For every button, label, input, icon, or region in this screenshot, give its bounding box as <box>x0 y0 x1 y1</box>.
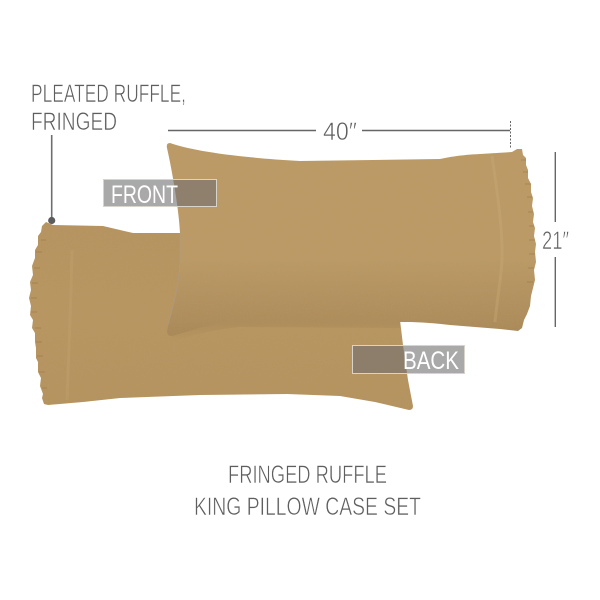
front pillow left edge highlight <box>168 233 180 325</box>
dimension: height 21 inches: 21″ <box>542 227 569 255</box>
callout text line 1: PLEATED RUFFLE, <box>31 80 186 108</box>
front pillow seam <box>492 156 502 322</box>
back pillow <box>29 222 413 410</box>
callout: pleated ruffle, fringed <box>31 80 186 224</box>
callout text line 2: FRINGED <box>31 108 117 136</box>
callout leader line <box>51 135 53 220</box>
title: FRINGED RUFFLE <box>228 461 387 489</box>
callout dot <box>48 217 55 224</box>
label: back <box>352 346 464 375</box>
back pillow fringe ticks <box>31 240 47 388</box>
front pillow fringe ticks <box>521 160 535 282</box>
back pillow seam <box>67 250 72 400</box>
front pillow <box>167 143 536 336</box>
front pillow shadow on back pillow <box>172 321 400 341</box>
title: KING PILLOW CASE SET <box>194 493 421 521</box>
title <box>194 461 421 521</box>
label: back: BACK <box>403 347 459 375</box>
label: front: FRONT <box>111 181 178 209</box>
dimension: width 40 inches: 40″ <box>323 118 357 146</box>
